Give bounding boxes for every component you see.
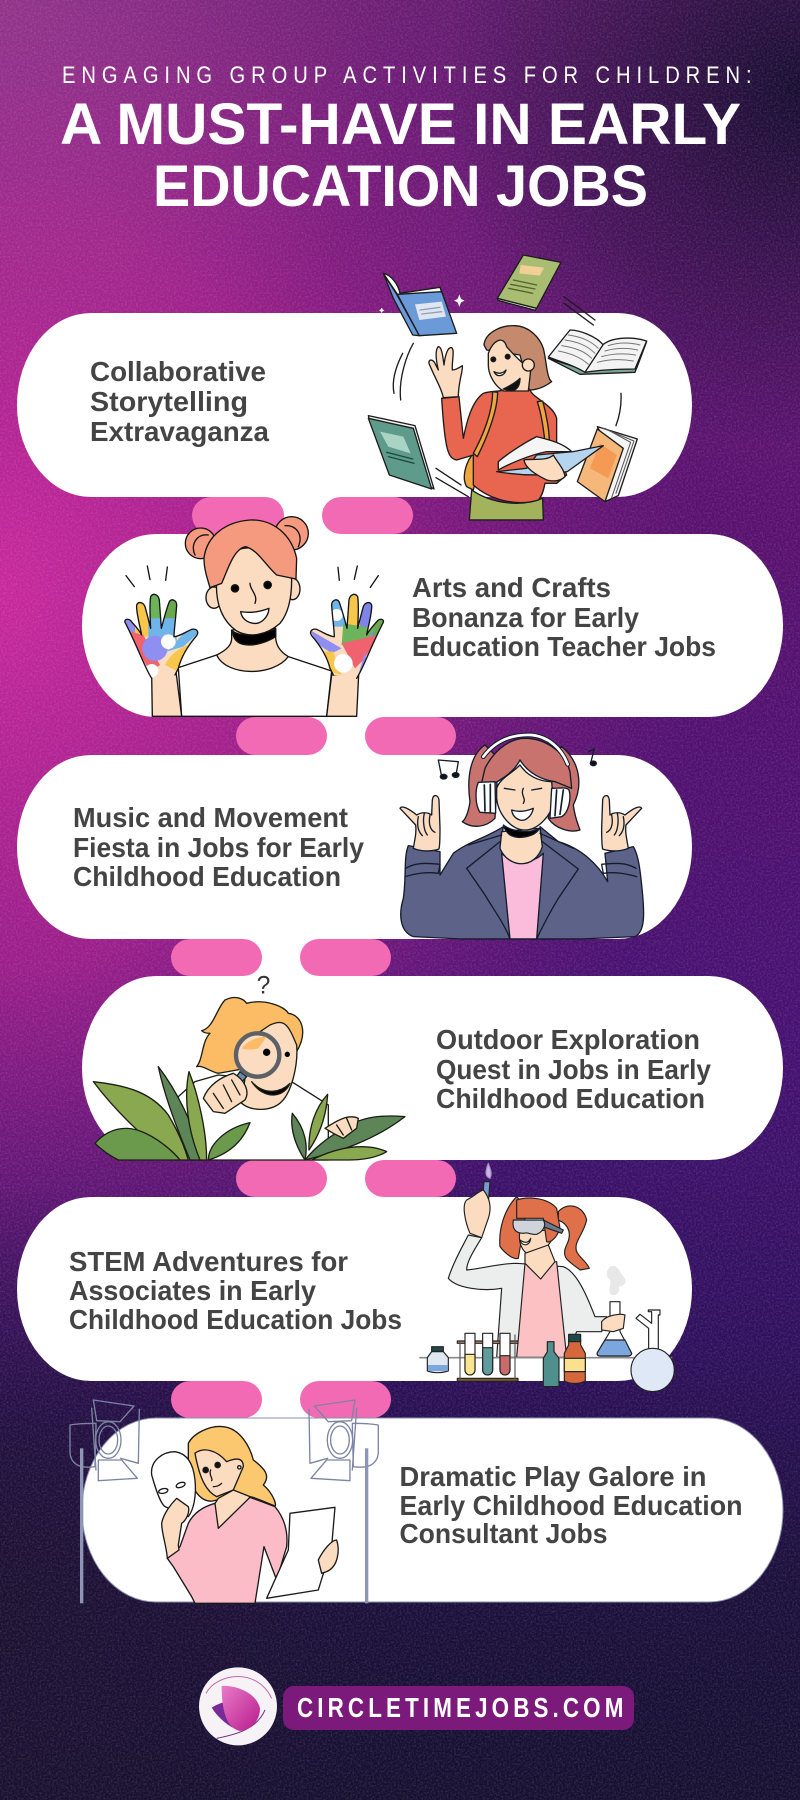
shirt	[178, 655, 332, 716]
right hand	[602, 1314, 625, 1332]
headphone cups	[476, 782, 570, 818]
question mark: ?	[257, 972, 270, 999]
logo arcs	[206, 1676, 272, 1698]
website text: CIRCLETIMEJOBS.COM	[297, 1693, 623, 1724]
book in hands	[497, 437, 603, 481]
connector 5	[171, 1378, 391, 1422]
icon: teal book	[368, 416, 434, 489]
icon: green book	[497, 255, 561, 310]
face	[242, 1022, 297, 1109]
pink shirt	[502, 853, 543, 939]
mouth	[520, 1238, 531, 1245]
magnifying glass	[236, 1033, 279, 1077]
icon: left painted hand	[124, 594, 198, 679]
eyes, nose and mouth	[504, 788, 542, 820]
jacket lapels and cuffs	[405, 833, 637, 939]
jacket	[401, 827, 644, 939]
panel 1	[17, 313, 692, 497]
mouth	[252, 1082, 290, 1095]
goggles	[513, 1220, 563, 1234]
logo circle	[199, 1667, 277, 1745]
website banner	[283, 1686, 634, 1730]
raised hand	[464, 1190, 490, 1238]
text: panel 3: Music and Movement	[73, 802, 348, 833]
pink shirt	[517, 1262, 567, 1357]
bag	[464, 452, 479, 490]
neck	[500, 828, 542, 864]
sweater	[167, 1497, 287, 1603]
text: panel 5: Associates in Early	[69, 1275, 317, 1306]
illustration: girl with painted hands	[120, 517, 388, 716]
text: panel 6	[400, 1461, 742, 1549]
stage light right	[309, 1400, 378, 1603]
text: panel 3: Childhood Education	[73, 861, 341, 892]
eyes, nose and mouth	[231, 581, 271, 623]
mask	[152, 1452, 195, 1517]
raised hand	[429, 347, 462, 398]
neck shadow	[232, 629, 276, 645]
headphone band	[483, 735, 568, 764]
eyes	[263, 1049, 290, 1057]
lab coat	[448, 1235, 607, 1357]
hair buns	[185, 517, 308, 559]
arms	[152, 672, 359, 716]
hand holding mask	[162, 1498, 189, 1558]
fist	[203, 1073, 247, 1113]
sweater	[442, 390, 567, 503]
text: panel 1: Storytelling	[90, 386, 248, 417]
text: panel 2: Education Teacher Jobs	[412, 631, 716, 662]
paper	[267, 1507, 335, 1598]
hair	[204, 520, 297, 588]
illustration: girl with magnifying glass in plants	[93, 972, 405, 1160]
icon: orange book	[577, 427, 637, 502]
music notes	[438, 749, 596, 779]
main title line 1: A MUST-HAVE IN EARLY	[60, 92, 741, 157]
teal bottle	[543, 1342, 559, 1387]
text: panel 4: Outdoor Exploration	[436, 1024, 700, 1055]
test tube rack	[457, 1333, 518, 1381]
logo main petal	[222, 1686, 260, 1731]
text: panel 4: Childhood Education	[436, 1083, 705, 1114]
text: panel 1: Collaborative	[90, 356, 266, 387]
text: panel 2	[412, 572, 716, 662]
logo left petal	[212, 1701, 240, 1731]
icon: right painted hand	[310, 594, 384, 679]
bench line	[420, 1355, 672, 1360]
panel 4	[82, 976, 783, 1160]
eyes and smile	[491, 354, 520, 391]
panel 6	[82, 1418, 783, 1602]
illustration: scientist with lab equipment	[420, 1163, 674, 1392]
face	[216, 548, 292, 635]
motion lines	[393, 297, 621, 497]
small bottle	[427, 1347, 448, 1373]
title block	[60, 61, 752, 219]
connector 2	[236, 714, 456, 758]
text: panel 5: Childhood Education Jobs	[69, 1304, 402, 1335]
text: panel 4: Quest in Jobs in Early	[436, 1054, 712, 1085]
headphone band highlight	[483, 735, 568, 764]
neck	[217, 628, 288, 671]
spark lines	[126, 566, 378, 587]
pigtails	[462, 745, 580, 831]
text: panel 6: Early Childhood Education	[400, 1490, 742, 1521]
panel 3	[17, 755, 692, 939]
shirt	[178, 1075, 328, 1160]
panel 5	[17, 1197, 692, 1381]
logo badge	[199, 1667, 277, 1745]
main title line 2: EDUCATION JOBS	[153, 154, 648, 219]
text: panel 1	[90, 356, 270, 447]
skirt	[469, 490, 543, 520]
facial features	[203, 1462, 241, 1487]
text: panel 5: STEM Adventures for	[69, 1246, 348, 1277]
hair top	[517, 1198, 560, 1242]
right rock hand	[602, 796, 642, 851]
neck	[525, 1245, 555, 1279]
hand holding paper	[318, 1540, 338, 1573]
smoke	[607, 1266, 626, 1295]
text: panel 6: Dramatic Play Galore in	[400, 1461, 706, 1492]
hand on leaf	[325, 1117, 358, 1138]
face	[195, 1450, 243, 1497]
connector 4	[236, 1157, 456, 1201]
panel 2	[82, 534, 783, 717]
icon: open book	[548, 330, 647, 374]
ear	[522, 359, 534, 371]
illustration: woman with mask and stage lights	[70, 1400, 378, 1603]
connector 3	[171, 936, 391, 980]
hair	[197, 998, 303, 1073]
leaves left	[93, 1067, 250, 1160]
text: panel 6: Consultant Jobs	[400, 1518, 608, 1549]
text: panel 2: Arts and Crafts	[412, 572, 611, 603]
handle	[236, 1072, 247, 1082]
text: panel 4	[436, 1024, 712, 1114]
hair back	[484, 326, 552, 390]
test tube	[481, 1182, 490, 1215]
neck	[214, 1490, 250, 1528]
flame	[486, 1163, 491, 1178]
ponytail and hair back	[500, 1197, 589, 1270]
text: panel 3	[73, 802, 365, 892]
hair under glass	[242, 1037, 267, 1050]
sparkles	[379, 294, 465, 313]
round flask	[631, 1310, 674, 1392]
text: panel 3: Fiesta in Jobs for Early	[73, 832, 365, 863]
text: panel 2: Bonanza for Early	[412, 602, 640, 633]
face	[488, 340, 531, 391]
hair	[188, 1426, 275, 1506]
connector 1	[192, 494, 413, 538]
blue flask	[597, 1302, 632, 1356]
illustration: girl with headphones	[400, 735, 644, 939]
logo lower arc	[217, 1710, 265, 1738]
face	[519, 1230, 553, 1254]
face	[497, 765, 553, 830]
illustration: woman juggling books	[368, 255, 647, 520]
subtitle: ENGAGING GROUP ACTIVITIES FOR CHILDREN:	[62, 61, 752, 88]
text: panel 5	[69, 1246, 402, 1335]
neck shadow	[503, 825, 539, 837]
leaves right	[292, 1094, 405, 1160]
banner background	[283, 1686, 634, 1730]
icon: blue book	[383, 273, 457, 336]
left rock hand	[400, 796, 440, 851]
hair top	[480, 738, 572, 790]
stage light left	[70, 1400, 139, 1603]
bag straps	[473, 392, 549, 457]
text: panel 1: Extravaganza	[90, 416, 270, 447]
ears	[206, 578, 300, 608]
orange bottle	[564, 1334, 585, 1383]
